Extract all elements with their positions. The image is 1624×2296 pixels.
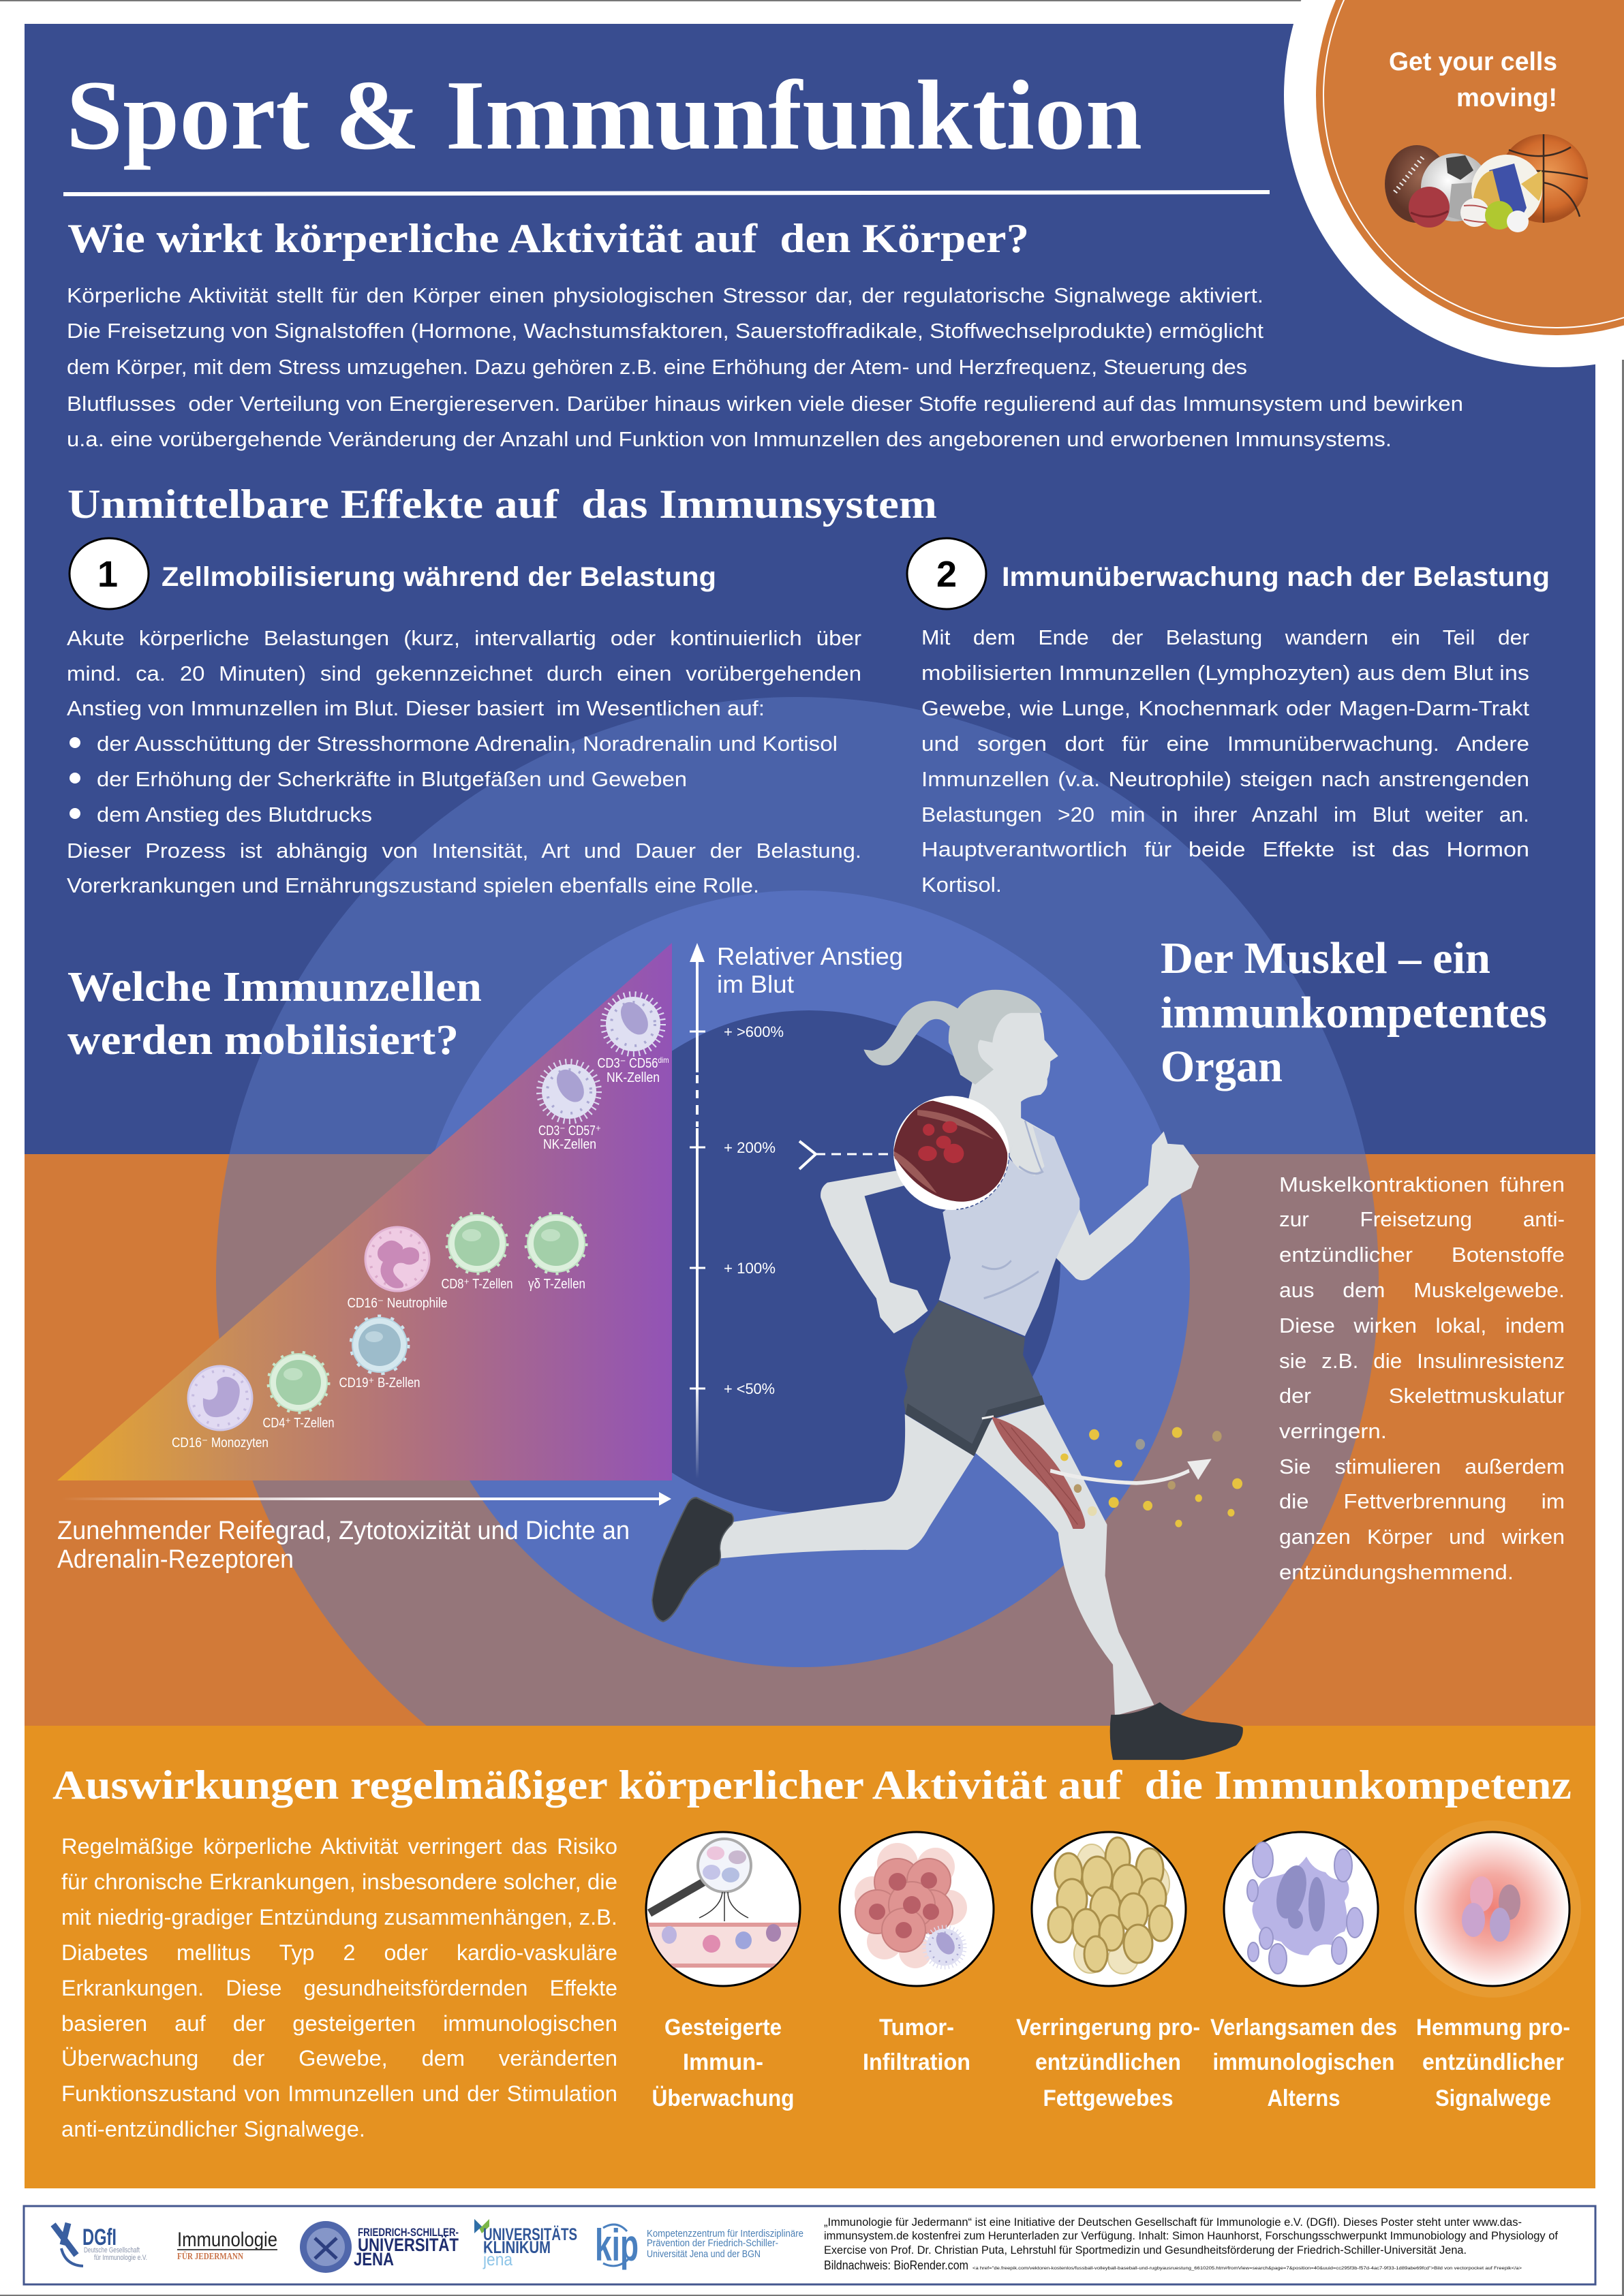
heading: auswirkungen: Auswirkungen regelmäßiger körperlicher Aktivität auf die Immunkompetenz [52,1763,1572,1808]
panel: yellow-orange lower section [25,1726,1595,2188]
intro text block: dem Körper, mit dem Stress umzugehen. Dazu gehören z.B. eine Erhöhung der Atem- und Herzfrequenz, Steuerung des [67,355,1247,379]
cell: CD19 B: CD19⁺ B-Zellen [339,1376,420,1391]
logo: Friedrich-Schiller-Universitaet Jena [300,2221,459,2273]
cell: monocyte: CD16⁻ Monozyten [172,1436,269,1450]
cell: monocyte [172,1366,269,1450]
footer credits text: „Immunologie für Jedermann“ ist eine Initiative der Deutschen Gesellschaft für Immunologie e.V. (DGfI). Dieses Poster steht unter www.das- [824,2216,1522,2229]
shorts [904,1301,1045,1456]
logo: Immunologie fuer Jedermann: FÜR JEDERMANN [177,2250,243,2262]
logo: KIP: kip [595,2220,639,2270]
logo: Immunologie fuer Jedermann [177,2229,277,2262]
caption: gesteigerte immunueberwachung [652,2015,795,2111]
text block: immunueberwachung [921,625,1529,897]
cell: CD19 B [339,1317,420,1391]
icon: immunosenescence [1224,1832,1378,1986]
logo: KIP: Kompetenzzentrum für Interdisziplinäre [647,2228,803,2239]
axis label: Relativer Anstieg [717,942,903,970]
logo: Friedrich-Schiller-Universitaet Jena: FRIEDRICH-SCHILLER- [358,2226,459,2239]
logo: DGfI: DGfI [82,2224,117,2250]
caption: tumor-infiltration: Infiltration [863,2049,970,2075]
footer credits text: Bildnachweis: BioRender.com [824,2259,968,2272]
horizontal axis label: Zunehmender Reifegrad, Zytotoxizität und Dichte an [57,1517,630,1545]
head and neck [956,1010,1058,1155]
text block: immunueberwachung: Belastungen >20 min in ihrer Anzahl im Blut weiter an. [921,803,1529,826]
text block: immunueberwachung: und sorgen dort für eine Immunüberwachung. Andere [921,732,1529,756]
number badge 1: 1 [97,554,118,595]
text block: immunueberwachung: Kortisol. [921,873,1002,897]
heading: wie wirkt: Wie wirkt körperliche Aktivität auf den Körper? [67,216,1029,261]
text block: zellmobilisierung: Dieser Prozess ist abhängig von Intensität, Art und Dauer der Belastung. [67,839,861,863]
text block: regelmaessige aktivitaet: Diabetes mellitus Typ 2 oder kardio-vaskuläre [61,1940,617,1965]
axis tick labels: + >600% [724,1023,784,1040]
badge: get your cells moving [1284,0,1624,367]
background concentric circles [216,697,1379,1726]
logo: Universitaetsklinikum Jena: jena [482,2249,512,2269]
footer panel [24,2206,1595,2284]
cell: CD3- CD57+ NK: CD3⁻ CD57⁺ [538,1123,601,1138]
torso tank top [939,1126,1079,1336]
text block: regelmaessige aktivitaet: basieren auf der gesteigerten immunologischen [61,2011,617,2036]
text block: muskelkontraktionen: Muskelkontraktionen führen [1279,1173,1565,1196]
caption: fettgewebe [1016,2015,1200,2111]
cell: gamma delta T: γδ T-Zellen [528,1277,585,1292]
caption: altern [1210,2015,1397,2111]
myokine particles and arrow [1050,1427,1242,1527]
caption: signalwege: Signalwege [1435,2085,1551,2111]
cell: CD3- CD56dim NK: dim [658,1055,669,1065]
heading: welche immunzellen [67,964,482,1064]
dashed pointer to vessel [799,1141,894,1169]
badge text: moving! [1456,84,1557,112]
caption: gesteigerte immunueberwachung: Überwachung [652,2085,795,2111]
horizontal axis label [57,1517,630,1574]
logo: Friedrich-Schiller-Universitaet Jena: JENA [354,2249,394,2269]
cell: CD8 T [442,1214,512,1292]
text block: muskelkontraktionen: sie z.B. die Insulinresistenz [1279,1349,1565,1373]
text block: immunueberwachung: mobilisierten Immunzellen (Lymphozyten) aus dem Blut ins [921,661,1529,685]
cell: neutrophil: CD16⁻ Neutrophile [348,1296,447,1311]
cell: CD3- CD57+ NK [538,1063,601,1152]
logo: KIP: Prävention der Friedrich-Schiller- [647,2237,778,2249]
text block: zellmobilisierung: Akute körperliche Belastungen (kurz, intervallartig oder kontinuierlich über [67,626,861,650]
logo: Universitaetsklinikum Jena: KLINIKUM [483,2238,551,2257]
panel: orange middle section [25,1154,1595,1726]
text block: immunueberwachung: Gewebe, wie Lunge, Knochenmark oder Magen-Darm-Trakt [921,696,1529,720]
axis tick labels: + 100% [724,1260,776,1277]
icon: immune surveillance [644,1832,808,1986]
text block: immunueberwachung: Immunzellen (v.a. Neutrophile) steigen nach anstrengenden [921,767,1529,791]
axis tick labels [724,1023,784,1397]
text block: muskelkontraktionen: entzündungshemmend. [1279,1560,1514,1584]
subheading 2: Immunüberwachung nach der Belastung [1002,562,1550,592]
footer credits text: immunsystem.de kostenfrei zum Herunterladen zur Verfügung. Inhalt: Simon Haunhorst, Forschungsschwerpunkt Immunobiology and Physiology of [824,2229,1558,2242]
heading: welche immunzellen: werden mobilisiert? [67,1017,459,1064]
number badge 1 [70,538,149,609]
caption: tumor-infiltration [863,2015,970,2075]
text block: zellmobilisierung: Vorerkrankungen und Ernährungszustand spielen ebenfalls eine Rolle. [67,873,759,897]
icon: tumor infiltration [840,1832,994,1986]
footer credits text: Exercise von Prof. Dr. Christian Puta, Lehrstuhl für Sportmedizin und Gesundheitsförderung der Friedrich-Schiller-Universität Jena. [824,2244,1467,2256]
footer credits text: <a href="de.freepik.com/vektoren-kostenlos/fussball-volleyball-baseball-und-rugbyausruestung_6610205.htm#fromView=search&page=7&position=40&uuid=cc295f3b-f57d-4ac7-9f33-1d89abe69fcd">Bild von vectorpocket auf Freepik</a> [972,2267,1522,2271]
heading: welche immunzellen: Welche Immunzellen [67,964,482,1010]
text block: zellmobilisierung: der Ausschüttung der Stresshormone Adrenalin, Noradrenalin und Kortisol [97,732,838,756]
cell: gamma delta T [527,1214,585,1292]
front arm [1056,1132,1199,1280]
text block: zellmobilisierung: dem Anstieg des Blutdrucks [97,803,372,826]
axis tick labels: + <50% [724,1380,775,1397]
text block: regelmaessige aktivitaet: Überwachung der Gewebe, dem veränderten [61,2046,617,2070]
text block: zellmobilisierung: Anstieg von Immunzellen im Blut. Dieser basiert im Wesentlichen auf: [67,696,765,720]
logo: Friedrich-Schiller-Universitaet Jena: UNIVERSITÄT [358,2235,459,2255]
caption: fettgewebe: Fettgewebes [1043,2085,1174,2111]
rear shoe [652,1498,733,1622]
intro text block: Körperliche Aktivität stellt für den Körper einen physiologischen Stressor dar, der regulatorische Signalwege aktiviert. [67,283,1263,307]
caption: altern: immunologischen [1213,2049,1394,2075]
logo: Immunologie fuer Jedermann: Immunologie [177,2229,277,2251]
text block: zellmobilisierung [67,626,861,897]
heading: der muskel [1161,933,1547,1091]
cell: CD8 T: CD8⁺ T-Zellen [442,1277,512,1292]
text block: muskelkontraktionen: entzündlicher Botenstoffe [1279,1243,1565,1267]
text block: muskelkontraktionen: zur Freisetzung anti- [1279,1207,1565,1231]
triangle chart: immune cells [57,943,672,1480]
icon: inflammation [1404,1820,1581,1998]
logo: KIP: Universität Jena und der BGN [647,2248,761,2260]
heading: der muskel: Organ [1161,1042,1283,1091]
caption: signalwege [1416,2015,1570,2111]
caption: altern: Alterns [1268,2085,1340,2111]
text block: regelmaessige aktivitaet: anti-entzündlicher Signalwege. [61,2117,365,2141]
horizontal axis label: Adrenalin-Rezeptoren [57,1545,294,1574]
vertical axis arrow with ticks [690,943,784,1478]
caption: gesteigerte immunueberwachung: Immun- [683,2049,763,2075]
text block: muskelkontraktionen: die Fettverbrennung im [1279,1489,1565,1513]
inset: blood vessel [893,1096,1009,1210]
intro text block: Die Freisetzung von Signalstoffen (Hormone, Wachstumsfaktoren, Sauerstoffradikale, Stoffwechselprodukte) ermöglicht [67,319,1263,343]
cell: CD3- CD56dim NK: NK-Zellen [607,1070,660,1085]
logo: KIP [595,2220,803,2270]
text block: zellmobilisierung: der Erhöhung der Scherkräfte in Blutgefäßen und Geweben [97,767,687,791]
logo: DGfI: für Immunologie e.V. [94,2254,147,2262]
axis label: im Blut [717,970,794,998]
logo: Universitaetsklinikum Jena [474,2219,577,2269]
shoulder skin [1009,1118,1079,1209]
horizontal arrow [61,1492,671,1506]
axis tick labels: + 200% [724,1139,776,1156]
text block: muskelkontraktionen: ganzen Körper und wirken [1279,1525,1565,1549]
axis label [717,942,903,998]
number badge 2 [907,538,986,609]
badge text [1389,48,1557,112]
front leg [974,1404,1154,1716]
text block: muskelkontraktionen: Diese wirken lokal, indem [1279,1314,1565,1337]
cell: CD3- CD56dim NK [597,995,669,1085]
text block: immunueberwachung: Mit dem Ende der Belastung wandern ein Teil der [921,625,1529,649]
text block: regelmaessige aktivitaet [61,1834,617,2141]
muscle [982,1416,1085,1529]
subheading 1: Zellmobilisierung während der Belastung [162,562,716,592]
caption: gesteigerte immunueberwachung: Gesteigerte [664,2015,782,2041]
intro text block [67,283,1463,451]
text block: muskelkontraktionen: verringern. [1279,1419,1387,1443]
cell: CD4 T: CD4⁺ T-Zellen [263,1416,334,1431]
cell: CD3- CD56dim NK: CD3⁻ CD56 [597,1056,671,1071]
logo: DGfI: Deutsche Gesellschaft [84,2246,140,2254]
caption: altern: Verlangsamen des [1210,2015,1397,2041]
icon: sports balls [1385,134,1588,232]
text block: muskelkontraktionen: aus dem Muskelgewebe. [1279,1278,1565,1302]
text block: regelmaessige aktivitaet: Erkrankungen. Diese gesundheitsfördernden Effekte [61,1976,617,2000]
hair and ponytail [863,990,1042,1085]
caption: signalwege: Hemmung pro- [1416,2015,1570,2041]
title rule [63,192,1270,194]
text block: immunueberwachung: Hauptverantwortlich für beide Effekte ist das Hormon [921,837,1529,861]
front shoe [1110,1703,1243,1760]
text block: muskelkontraktionen: der Skelettmuskulatur [1279,1384,1565,1408]
caption: tumor-infiltration: Tumor- [879,2015,954,2041]
caption: fettgewebe: Verringerung pro- [1016,2015,1200,2041]
text block: regelmaessige aktivitaet: für chronische Erkrankungen, insbesondere solcher, die [61,1870,617,1894]
cell: CD4 T [263,1353,334,1431]
heading: unmittelbare effekte: Unmittelbare Effekte auf das Immunsystem [67,482,937,527]
heading: der muskel: Der Muskel – ein [1161,933,1490,983]
intro text block: u.a. eine vorübergehende Veränderung der Anzahl und Funktion von Immunzellen des angeborenen und erworbenen Immunsystems. [67,427,1392,451]
text block: regelmaessige aktivitaet: Regelmäßige körperliche Aktivität verringert das Risiko [61,1834,617,1859]
heading: der muskel: immunkompetentes [1161,988,1547,1038]
panel: blue upper section [25,24,1595,1154]
badge text: Get your cells [1389,48,1557,76]
text block: muskelkontraktionen [1279,1173,1565,1584]
runner figure [652,990,1243,1760]
footer credits text [824,2216,1558,2272]
intro text block: Blutflusses oder Verteilung von Energiereserven. Darüber hinaus wirken viele dieser Stoffe regulierend auf das Immunsystem und bewirken [67,392,1463,416]
logo: DGfI [53,2223,147,2266]
text block: regelmaessige aktivitaet: mit niedrig-gradiger Entzündung zusammenhängen, z.B. [61,1905,617,1929]
cell: CD3- CD57+ NK: NK-Zellen [543,1137,596,1152]
rear arm [821,1169,928,1333]
caption: fettgewebe: entzündlichen [1035,2049,1181,2075]
cell: neutrophil [348,1227,447,1311]
text block: zellmobilisierung: mind. ca. 20 Minuten) sind gekennzeichnet durch einen vorübergehenden [67,662,861,685]
number badge 2: 2 [936,554,957,595]
text block: regelmaessige aktivitaet: Funktionszustand von Immunzellen und der Stimulation [61,2081,617,2106]
icon: adipose tissue [1032,1832,1186,1986]
title: Sport & Immunfunktion [66,60,1142,170]
rear leg [720,1414,974,1558]
logo: Universitaetsklinikum Jena: UNIVERSITÄTS [483,2225,577,2244]
text block: muskelkontraktionen: Sie stimulieren außerdem [1279,1455,1565,1478]
caption: signalwege: entzündlicher [1422,2049,1564,2075]
